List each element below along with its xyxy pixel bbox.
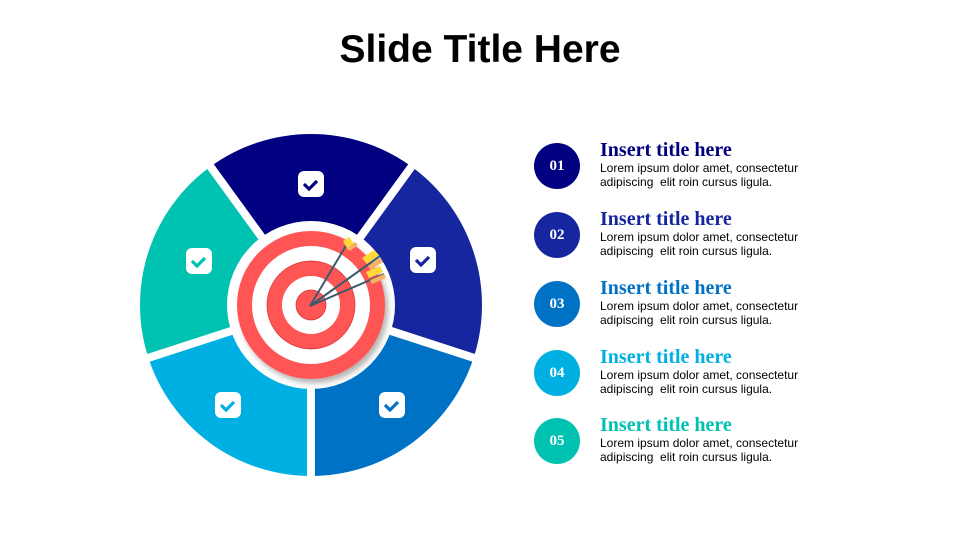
list item 01 [534, 139, 798, 189]
title: Slide Title Here [339, 28, 621, 71]
segment 4 [145, 305, 311, 480]
icons: check badges [186, 171, 436, 418]
arrows [310, 244, 384, 306]
list item 01: Lorem ipsum dolor amet, consectetur [600, 161, 798, 175]
list item 05: adipiscing elit roin cursus ligula. [600, 450, 772, 464]
list item 04 [534, 346, 798, 396]
list item 02: Lorem ipsum dolor amet, consectetur [600, 230, 798, 244]
list item 04: Lorem ipsum dolor amet, consectetur [600, 368, 798, 382]
list item 01: adipiscing elit roin cursus ligula. [600, 175, 772, 189]
list item 05: 05 [550, 433, 564, 449]
segment 5 [136, 163, 311, 359]
list item 05: Insert title here [600, 414, 732, 436]
list item 03: Insert title here [600, 277, 732, 299]
segment 3 [311, 305, 477, 480]
list item 03: Lorem ipsum dolor amet, consectetur [600, 299, 798, 313]
list item 02: 02 [550, 227, 564, 243]
list item 04: 04 [550, 365, 564, 381]
list item 04: Insert title here [600, 346, 732, 368]
segment 1 [208, 130, 414, 305]
list item 03: adipiscing elit roin cursus ligula. [600, 313, 772, 327]
target [237, 231, 385, 379]
list item 04: adipiscing elit roin cursus ligula. [600, 382, 772, 396]
list item 02 [534, 208, 798, 258]
list item 05 [534, 414, 798, 464]
list item 03 [534, 277, 798, 327]
list item 03: 03 [550, 296, 564, 312]
list item 01: Insert title here [600, 139, 732, 161]
list item 02: Insert title here [600, 208, 732, 230]
segment 2 [311, 163, 486, 359]
list item 01: 01 [550, 158, 564, 174]
list item 05: Lorem ipsum dolor amet, consectetur [600, 436, 798, 450]
list item 02: adipiscing elit roin cursus ligula. [600, 244, 772, 258]
